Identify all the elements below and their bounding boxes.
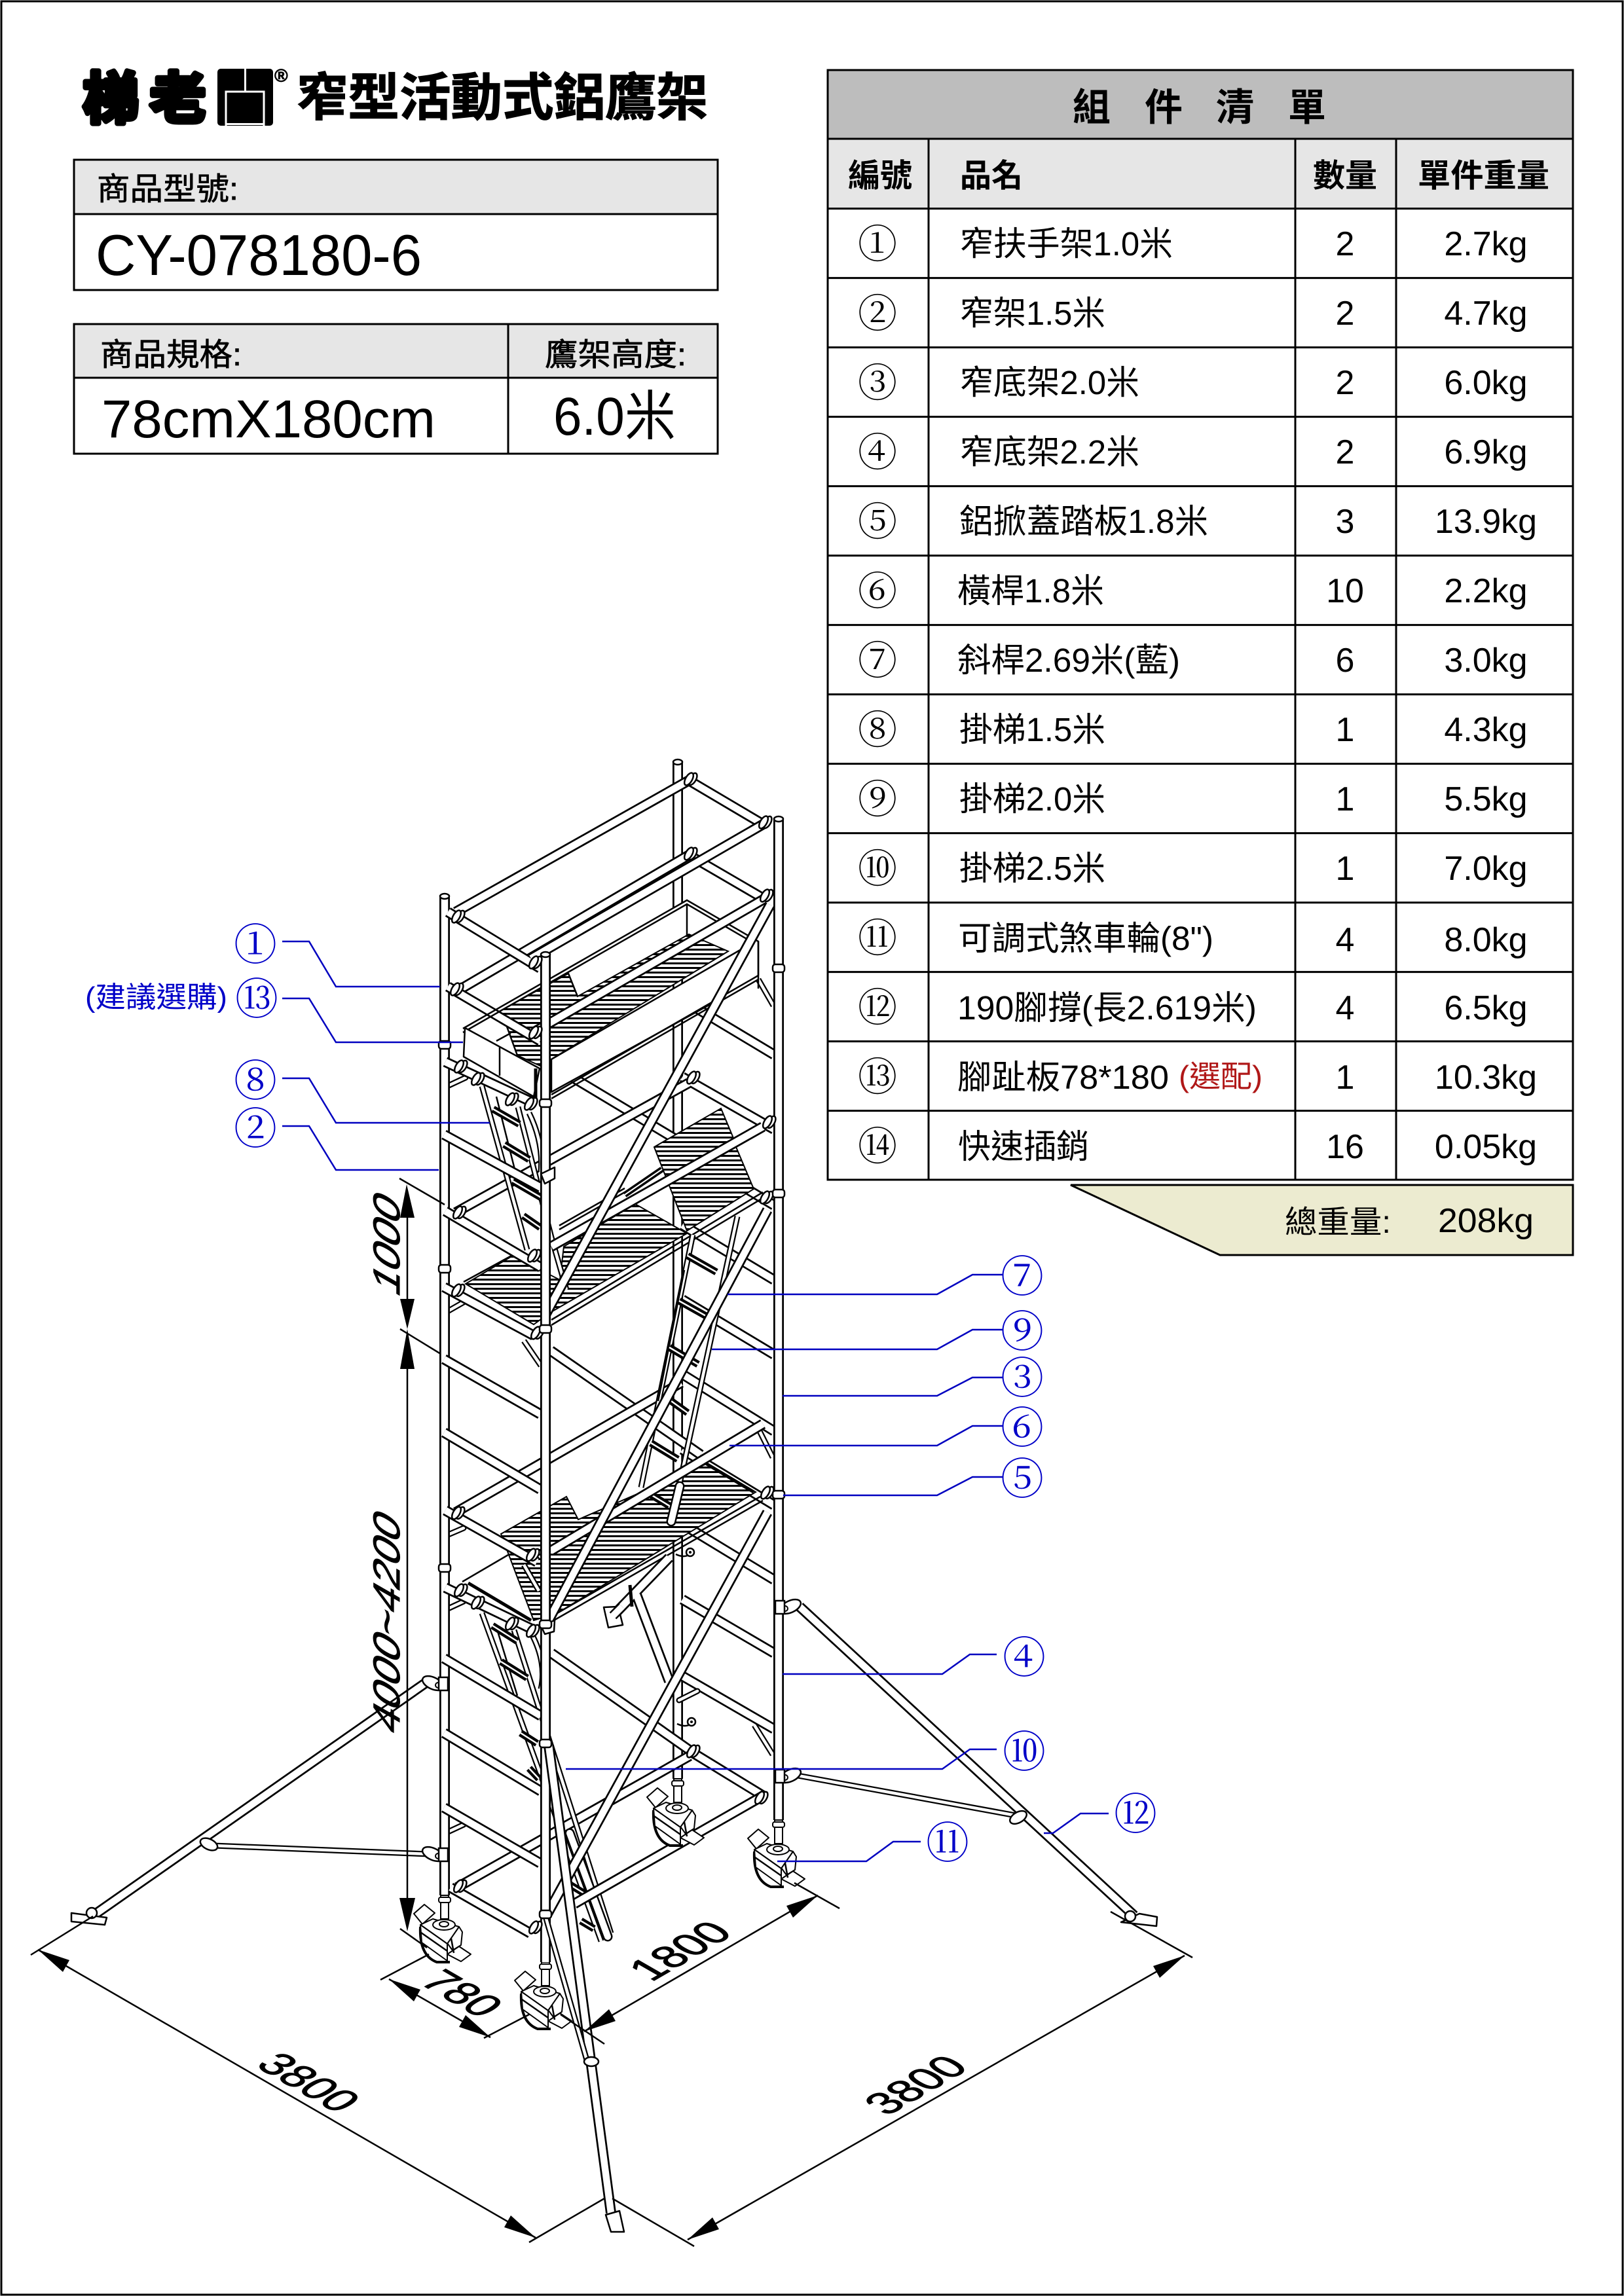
panel: component list table — [828, 70, 1573, 1180]
spec value: 78cmX180cm — [101, 390, 435, 449]
unit weights: 2.7kg — [1444, 225, 1528, 263]
quantities: 1 — [1336, 850, 1354, 888]
diagonal braces — [545, 905, 770, 1915]
inner cross tubes — [550, 1064, 701, 1754]
optional purchase note: (建議選購) — [85, 981, 227, 1013]
callout 4: ④ — [1003, 1623, 1046, 1685]
quantities: 16 — [1326, 1128, 1364, 1166]
part names: 掛梯2.5米 — [959, 850, 1105, 887]
gusset braces — [524, 979, 773, 1755]
callout 8: ⑧ — [234, 1046, 277, 1108]
back upright — [673, 759, 682, 1779]
left callouts — [85, 910, 490, 1170]
upper ladder tip — [671, 1486, 680, 1522]
callout 4 — [783, 1623, 1046, 1685]
unit weights: 4.3kg — [1444, 711, 1528, 749]
part names: 掛梯1.5米 — [959, 711, 1105, 748]
total label: 總重量: — [1285, 1205, 1391, 1240]
unit weights: 7.0kg — [1444, 850, 1528, 888]
unit weights: 4.7kg — [1444, 295, 1528, 333]
circled row numbers: ③ — [858, 352, 897, 409]
part names: 窄架1.5米 — [960, 295, 1105, 332]
circled row numbers: ⑦ — [858, 630, 897, 686]
label 4000~4200: 4000~4200 — [365, 1501, 407, 1741]
unit weights: 2.2kg — [1444, 572, 1528, 610]
brand logo — [83, 68, 273, 131]
quantities: 2 — [1336, 433, 1354, 471]
table title: 單 — [1288, 86, 1326, 129]
callout 11: ⑪ — [926, 1808, 969, 1870]
brand logo: 闆 — [218, 71, 272, 130]
table header: 品名 — [960, 158, 1023, 194]
dimension: width 780 — [380, 1954, 529, 2038]
callout 12 — [1044, 1779, 1157, 1842]
quantities: 4 — [1336, 989, 1354, 1027]
callout 2: ② — [234, 1094, 277, 1156]
circled row numbers — [858, 213, 897, 1172]
unit weights: 3.0kg — [1444, 642, 1528, 680]
tube clamps — [449, 771, 777, 1935]
callout 13: ⑬ — [235, 964, 278, 1027]
callout 2 — [234, 1094, 439, 1170]
callout 10 — [566, 1717, 1046, 1779]
ladder rails — [482, 1086, 737, 1941]
part names: 斜桿2.69米(藍) — [957, 642, 1180, 679]
part names: 掛梯2.0米 — [959, 780, 1105, 818]
quantities: 2 — [1336, 225, 1354, 263]
registered mark: ® — [274, 65, 288, 86]
callout 10: ⑩ — [1003, 1717, 1046, 1779]
upright sleeves — [439, 964, 784, 1918]
quantities — [1326, 225, 1364, 1166]
part names: 窄底架2.0米 — [960, 364, 1139, 401]
circled row numbers: ⑧ — [858, 699, 897, 756]
circled row numbers: ⑨ — [858, 769, 897, 825]
label 1000: 1000 — [365, 1183, 407, 1303]
quantities: 1 — [1336, 780, 1354, 818]
part names: 橫桿1.8米 — [957, 572, 1104, 610]
brand logo: 梯 — [83, 69, 139, 131]
callout 12: ⑫ — [1114, 1779, 1157, 1842]
circled row numbers: ⑫ — [858, 977, 897, 1033]
quantities: 3 — [1336, 503, 1354, 541]
unit weights — [1435, 225, 1537, 1166]
table title: 件 — [1145, 86, 1183, 129]
front long rails — [531, 824, 764, 1904]
callout 5: ⑤ — [1001, 1444, 1044, 1506]
table title: 組 — [1073, 86, 1111, 129]
callout 1 — [234, 910, 440, 987]
scaffold line drawing — [71, 759, 1157, 2232]
front upright — [541, 952, 555, 1962]
callout 3: ③ — [1001, 1343, 1044, 1406]
dimension: left outrigger span 3800 — [31, 1916, 604, 2242]
part names: 腳趾板78*180 — [957, 1059, 1169, 1096]
product name: 窄型活動式鋁鷹架 — [297, 69, 708, 126]
unit weights: 8.0kg — [1444, 921, 1528, 959]
callout 1: ① — [234, 910, 277, 972]
quantities: 1 — [1336, 711, 1354, 749]
part names: 窄底架2.2米 — [960, 433, 1139, 471]
stub tubes — [445, 1078, 697, 1833]
callout 11 — [777, 1808, 969, 1870]
platform edges — [462, 1169, 765, 1621]
unit weights: 6.0kg — [1444, 364, 1528, 402]
spec label: 商品規格: — [100, 338, 242, 373]
dimension: left outrigger span 3800: 3800 — [246, 2046, 372, 2119]
model label: 商品型號: — [97, 172, 238, 207]
quantities: 2 — [1336, 295, 1354, 333]
dimension: right outrigger span 3800 — [612, 1912, 1192, 2246]
circled row numbers: ① — [858, 213, 897, 270]
circled row numbers: ⑪ — [858, 907, 897, 964]
quantities: 6 — [1336, 642, 1354, 680]
quantities: 10 — [1326, 572, 1364, 610]
callout 6 — [729, 1393, 1044, 1455]
part names — [957, 225, 1263, 1165]
callout 13 — [235, 964, 463, 1042]
callout 9: ⑨ — [1001, 1297, 1044, 1359]
part names: 快速插銷 — [958, 1128, 1089, 1165]
quantities: 1 — [1336, 1059, 1354, 1097]
part names: 190腳撐(長2.619米) — [957, 989, 1257, 1027]
table header — [848, 158, 1549, 194]
dimension: right outrigger span 3800: 3800 — [853, 2049, 978, 2121]
part names: 鋁掀蓋踏板1.8米 — [959, 503, 1208, 540]
back long rails — [456, 780, 690, 1887]
right callouts — [566, 1242, 1157, 1870]
toe board back panel — [463, 900, 758, 1029]
circled row numbers: ② — [858, 283, 897, 339]
circled row numbers: ⑥ — [858, 560, 897, 617]
platform hatching — [466, 934, 756, 1620]
total value: 208kg — [1438, 1202, 1534, 1240]
casters — [414, 1779, 805, 2029]
circled row numbers: ⑤ — [858, 491, 897, 547]
outrigger feet — [71, 1913, 107, 1925]
height label: 鷹架高度: — [545, 338, 686, 373]
outrigger legs — [71, 1597, 1157, 2232]
right and left uprights — [440, 816, 783, 1895]
circled row numbers: ④ — [858, 422, 897, 478]
unit weights: 10.3kg — [1435, 1059, 1537, 1097]
dimension: length 1800: 1800 — [617, 1914, 743, 1987]
part names: 可調式煞車輪(8") — [958, 920, 1213, 957]
unit weights: 13.9kg — [1435, 503, 1537, 541]
outrigger mid collars — [198, 1836, 219, 1853]
back frame rungs — [682, 780, 774, 1796]
callout 8 — [234, 1046, 490, 1123]
total weight callout — [1071, 1185, 1573, 1255]
callout 7: ⑦ — [1001, 1242, 1044, 1304]
table header: 單件重量 — [1418, 158, 1549, 194]
quantities: 2 — [1336, 364, 1354, 402]
title: brand logo and product name — [83, 65, 708, 131]
brand logo: 老 — [150, 69, 206, 131]
part names: (選配) — [1179, 1059, 1263, 1093]
unit weights: 5.5kg — [1444, 780, 1528, 818]
height value: 6.0米 — [553, 387, 676, 446]
unit weights: 6.9kg — [1444, 433, 1528, 471]
unit weights: 6.5kg — [1444, 989, 1528, 1027]
dimension: length 1800 — [561, 1883, 840, 2044]
outrigger clamps — [420, 1673, 448, 1693]
model value: CY-078180-6 — [96, 223, 422, 287]
ladder rungs — [492, 1109, 716, 1929]
panel: product spec and height — [74, 324, 718, 454]
callout 6: ⑥ — [1001, 1393, 1044, 1455]
callout 7 — [728, 1242, 1044, 1304]
quantities: 4 — [1336, 921, 1354, 959]
table header: 數量 — [1313, 158, 1377, 194]
callout 9 — [712, 1297, 1044, 1359]
table header: 編號 — [848, 158, 912, 194]
part names: 窄扶手架1.0米 — [960, 225, 1173, 263]
toe board — [463, 900, 758, 1099]
left frame rungs — [444, 1135, 541, 1863]
table title — [1073, 86, 1326, 129]
dimension: height 1000 and 4000~4200 — [365, 1178, 445, 1948]
circled row numbers: ⑩ — [858, 838, 897, 894]
unit weights: 0.05kg — [1435, 1128, 1537, 1166]
circled row numbers: ⑬ — [858, 1046, 897, 1102]
table title: 清 — [1216, 86, 1254, 129]
circled row numbers: ⑭ — [858, 1116, 897, 1172]
callout 3 — [783, 1343, 1044, 1406]
ladder bottom tip — [570, 1833, 608, 1937]
rear outrigger parts — [604, 1548, 695, 1726]
callout 5 — [783, 1444, 1044, 1506]
panel: product model — [74, 160, 718, 290]
dimension: width 780: 780 — [410, 1963, 515, 2024]
